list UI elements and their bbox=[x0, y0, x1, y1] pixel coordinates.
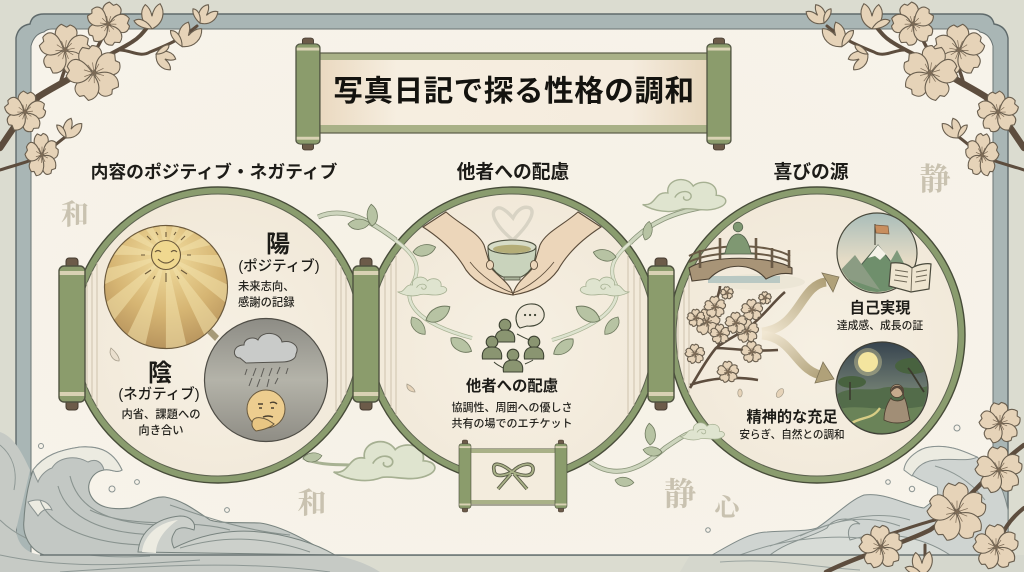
text: yang: 未来志向、 bbox=[238, 279, 294, 293]
title roller left bbox=[296, 38, 320, 150]
text: yin: 内省、課題への bbox=[121, 407, 201, 421]
petals bbox=[738, 387, 785, 399]
text: consideration bbox=[452, 377, 572, 430]
watermark kanji bbox=[61, 162, 950, 522]
leaf: trailing bbox=[643, 445, 662, 458]
text: self realization bbox=[837, 299, 923, 332]
panel: content circle bbox=[70, 187, 366, 483]
text: yin bbox=[118, 360, 201, 437]
vine and clouds: outer left of centre bbox=[303, 207, 705, 471]
wave: left bbox=[0, 432, 380, 572]
petal bbox=[110, 348, 119, 361]
petal bbox=[407, 384, 415, 392]
text: spiritual fulfilment: 安らぎ、自然との調和 bbox=[739, 428, 845, 441]
watermark kanji: 静 bbox=[920, 162, 950, 197]
clouds inside bbox=[398, 277, 447, 296]
cherry branch: bottom right bbox=[826, 402, 1024, 572]
watermark kanji: 心 bbox=[792, 213, 822, 242]
heading: content: 内容のポジティブ・ネガティブ bbox=[91, 161, 338, 182]
wave: right bbox=[680, 425, 1024, 572]
scroll: far left bbox=[59, 258, 85, 410]
text: yin: 陰 bbox=[148, 360, 172, 387]
leaves bbox=[409, 243, 621, 360]
text: consideration: 共有の場でのエチケット bbox=[452, 416, 572, 430]
text: yang: (ポジティブ) bbox=[238, 257, 320, 275]
icon: sun disc bbox=[104, 224, 228, 350]
icon: rain disc bbox=[204, 318, 328, 442]
title: 写真日記で探る性格の調和 bbox=[333, 75, 695, 108]
text: yang bbox=[238, 231, 320, 309]
panel: consideration circle bbox=[378, 186, 648, 474]
inner vines bbox=[395, 240, 630, 340]
cloud: right-circle lower left bbox=[680, 423, 725, 440]
leaves on vines bbox=[303, 204, 658, 490]
icon: mountain and book bbox=[836, 213, 931, 300]
cherry branch: top left bbox=[0, 0, 220, 178]
watermark kanji: 心 bbox=[714, 494, 743, 522]
text: self realization: 達成感、成長の証 bbox=[837, 318, 923, 332]
text: spiritual fulfilment: 精神的な充足 bbox=[746, 408, 838, 426]
text: consideration: 他者への配慮 bbox=[466, 377, 558, 395]
cloud: bottom left of centre bbox=[334, 442, 435, 481]
watermark kanji: 静 bbox=[664, 476, 696, 512]
text: spiritual fulfilment bbox=[739, 408, 845, 441]
ribbon scroll bbox=[459, 440, 567, 512]
scroll: centre left bbox=[353, 258, 379, 410]
scroll: centre right bbox=[648, 258, 674, 410]
title scroll bbox=[296, 38, 731, 150]
text: yin: (ネガティブ) bbox=[118, 385, 200, 403]
heading: joy: 喜びの源 bbox=[773, 161, 849, 182]
text: yang: 陽 bbox=[266, 231, 290, 258]
icon: bow bbox=[494, 464, 533, 489]
icon: people circle with speech bubble bbox=[482, 304, 544, 372]
icon: blossom branch bbox=[684, 286, 785, 388]
cloud: upper right of centre bbox=[643, 180, 726, 211]
icon: hands with tea cup bbox=[423, 207, 601, 295]
icon: bridge bbox=[689, 222, 805, 290]
cherry branch: top right bbox=[804, 0, 1024, 178]
connector neck bbox=[207, 329, 219, 341]
watermark kanji: 和 bbox=[61, 199, 89, 231]
arrow: down to spiritual fulfilment bbox=[762, 335, 834, 383]
text: consideration: 協調性、周囲への優しさ bbox=[452, 400, 572, 414]
watermark kanji: 和 bbox=[297, 487, 327, 520]
icon: moonlit meditator bbox=[836, 342, 930, 440]
title roller right bbox=[707, 38, 731, 150]
text: yin: 向き合い bbox=[138, 423, 184, 437]
arrow: up to self realization bbox=[762, 273, 839, 332]
text: yang: 感謝の記録 bbox=[238, 295, 295, 309]
heading: consideration: 他者への配慮 bbox=[457, 161, 570, 182]
panel: joy circle bbox=[669, 187, 965, 483]
text: self realization: 自己実現 bbox=[850, 299, 910, 317]
frame bottom line bbox=[40, 554, 1008, 556]
